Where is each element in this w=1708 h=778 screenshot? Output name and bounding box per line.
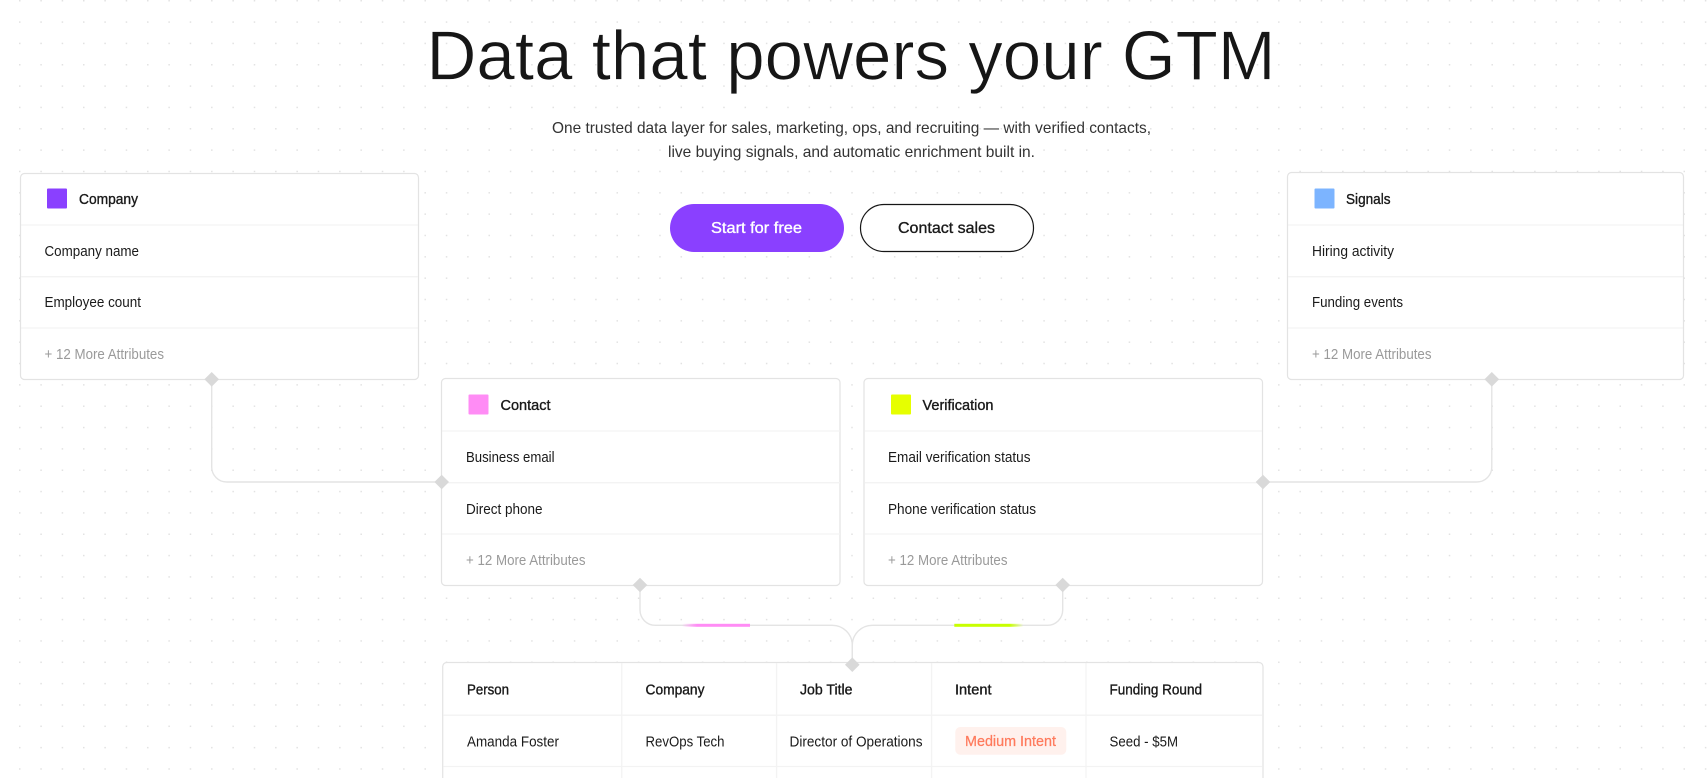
heading: verification: Verification bbox=[922, 398, 994, 414]
connector: contact to table bbox=[640, 586, 852, 664]
row: direct phone: Direct phone bbox=[466, 502, 542, 518]
title: Data that powers your GTM bbox=[426, 16, 1276, 94]
table header: Funding Round bbox=[1110, 682, 1202, 698]
icon: signals swatch bbox=[1314, 188, 1334, 208]
row: more attributes: + 12 More Attributes bbox=[888, 553, 1008, 569]
row: phone verification status: Phone verification status bbox=[888, 502, 1036, 518]
icon: contact swatch bbox=[468, 394, 488, 414]
table header: Person bbox=[467, 682, 509, 698]
row: more attributes: + 12 More Attributes bbox=[1312, 347, 1432, 363]
table row: Amanda Foster bbox=[467, 727, 1178, 755]
button: start for free: Start for free bbox=[711, 220, 802, 237]
node: contact left bbox=[434, 475, 449, 489]
button: contact sales bbox=[860, 204, 1034, 252]
subtitle: live buying signals, and automatic enrichment built in. bbox=[668, 144, 1035, 161]
panel: signals bbox=[1288, 172, 1684, 380]
table row: Amanda Foster: Director of Operations bbox=[790, 734, 922, 750]
pulse: lime bbox=[954, 624, 1023, 627]
node: verification right bbox=[1256, 475, 1270, 489]
icon: verification swatch bbox=[891, 394, 911, 414]
node: table top bbox=[845, 657, 860, 672]
node: company bbox=[204, 372, 219, 387]
node: contact bottom bbox=[633, 578, 647, 592]
row: business email: Business email bbox=[466, 450, 554, 466]
subtitle bbox=[552, 120, 1151, 161]
icon: company swatch bbox=[47, 188, 67, 208]
panel: company bbox=[20, 174, 418, 380]
row: employee count: Employee count bbox=[44, 295, 141, 311]
row: more attributes: + 12 More Attributes bbox=[466, 553, 586, 569]
button: start for free bbox=[670, 204, 844, 252]
table row: Amanda Foster: Medium Intent bbox=[965, 734, 1056, 750]
row: hiring activity: Hiring activity bbox=[1312, 244, 1395, 260]
connector: signals to verification bbox=[1263, 380, 1492, 482]
row: funding events: Funding events bbox=[1312, 295, 1403, 311]
row: more attributes: + 12 More Attributes bbox=[44, 347, 164, 363]
table header bbox=[467, 682, 1202, 698]
table row: Amanda Foster: Seed - $5M bbox=[1110, 734, 1178, 750]
row: email verification status: Email verification status bbox=[888, 450, 1030, 466]
button: contact sales: Contact sales bbox=[898, 220, 995, 237]
table header: Job Title bbox=[800, 682, 852, 698]
row: company name: Company name bbox=[44, 244, 139, 260]
table bbox=[443, 662, 1263, 778]
connector: company to contact bbox=[212, 380, 442, 482]
table header: Company bbox=[646, 682, 705, 698]
heading: company: Company bbox=[79, 192, 139, 208]
panel: verification bbox=[864, 378, 1262, 586]
heading: contact: Contact bbox=[500, 398, 550, 414]
table header: Intent bbox=[955, 682, 992, 698]
connector: verification to table bbox=[852, 586, 1063, 664]
subtitle: One trusted data layer for sales, marketing, ops, and recruiting — with verified contacts, bbox=[552, 120, 1151, 137]
heading: signals: Signals bbox=[1346, 192, 1390, 208]
panel: contact bbox=[442, 378, 840, 586]
table row: Amanda Foster: RevOps Tech bbox=[646, 734, 724, 750]
node: signals bbox=[1484, 372, 1499, 387]
table row: Amanda Foster: Amanda Foster bbox=[467, 734, 559, 750]
node: verification bottom bbox=[1055, 578, 1070, 592]
pulse: pink bbox=[682, 624, 750, 627]
